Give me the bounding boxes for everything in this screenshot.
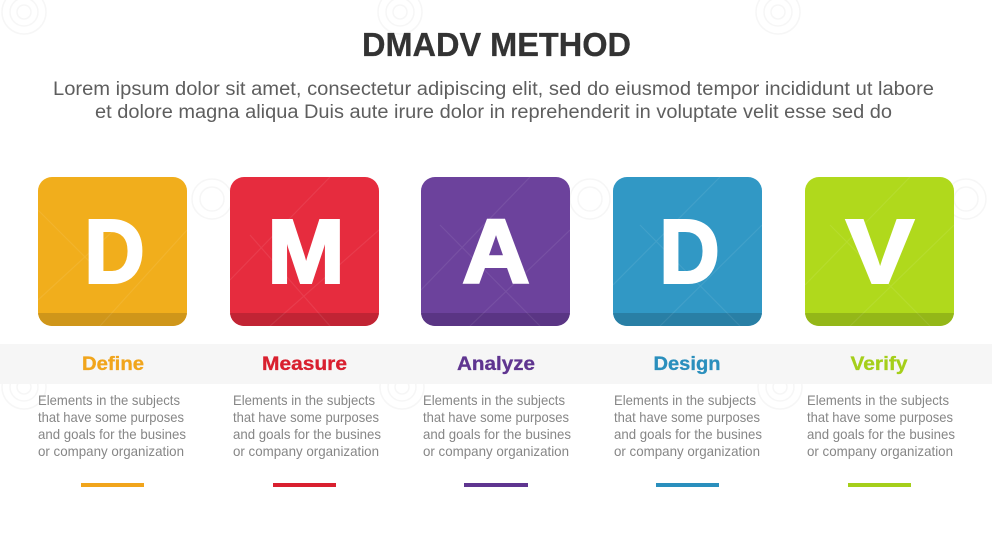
column: Define: and goals for the busines [38,426,186,442]
column: Measure: Measure [262,354,347,375]
column: Define: or company organization [38,443,184,459]
column: Analyze [423,354,571,487]
subtitle text block: et dolore magna aliqua Duis aute irure dolor in reprehenderit in voluptate velit esse sed do [95,102,892,123]
column: Measure: that have some purposes [233,409,379,425]
panel: A tile [421,177,570,326]
panel: D tile 2: D [660,202,720,302]
panel: V tile: V [846,202,914,302]
column: Design: Design [654,354,720,375]
panel: D tile 2 [613,177,762,326]
column: Design: and goals for the busines [614,426,762,442]
column: Define [38,354,186,487]
title: DMADV METHOD [362,26,631,63]
column: Measure [233,354,381,487]
column: Analyze: that have some purposes [423,409,569,425]
column: Analyze: and goals for the busines [423,426,571,442]
panel: M tile: M [268,202,344,302]
column: Verify [807,354,955,487]
column: Analyze: Analyze [457,354,535,375]
column: Verify: and goals for the busines [807,426,955,442]
column: Design: or company organization [614,443,760,459]
column: Verify: Elements in the subjects [807,392,949,408]
column: Measure: Elements in the subjects [233,392,375,408]
column: Analyze: Elements in the subjects [423,392,565,408]
column: Verify: Verify [850,354,908,375]
subtitle text block [53,79,934,123]
panel: D tile: D [84,202,144,302]
column: Analyze: or company organization [423,443,569,459]
panel: A tile: A [462,202,530,302]
panel: M tile [230,177,379,326]
column: Verify: that have some purposes [807,409,953,425]
panel: V tile [805,177,954,326]
column: Design [614,354,762,487]
panel: D tile [38,177,187,326]
column: Measure: and goals for the busines [233,426,381,442]
subtitle text block: Lorem ipsum dolor sit amet, consectetur adipiscing elit, sed do eiusmod tempor incididunt ut labore [53,79,934,100]
column: Design: Elements in the subjects [614,392,756,408]
column: Define: Define [82,354,144,375]
column: Define: that have some purposes [38,409,184,425]
label band [0,344,992,384]
column: Define: Elements in the subjects [38,392,180,408]
column: Verify: or company organization [807,443,953,459]
column: Measure: or company organization [233,443,379,459]
column: Design: that have some purposes [614,409,760,425]
